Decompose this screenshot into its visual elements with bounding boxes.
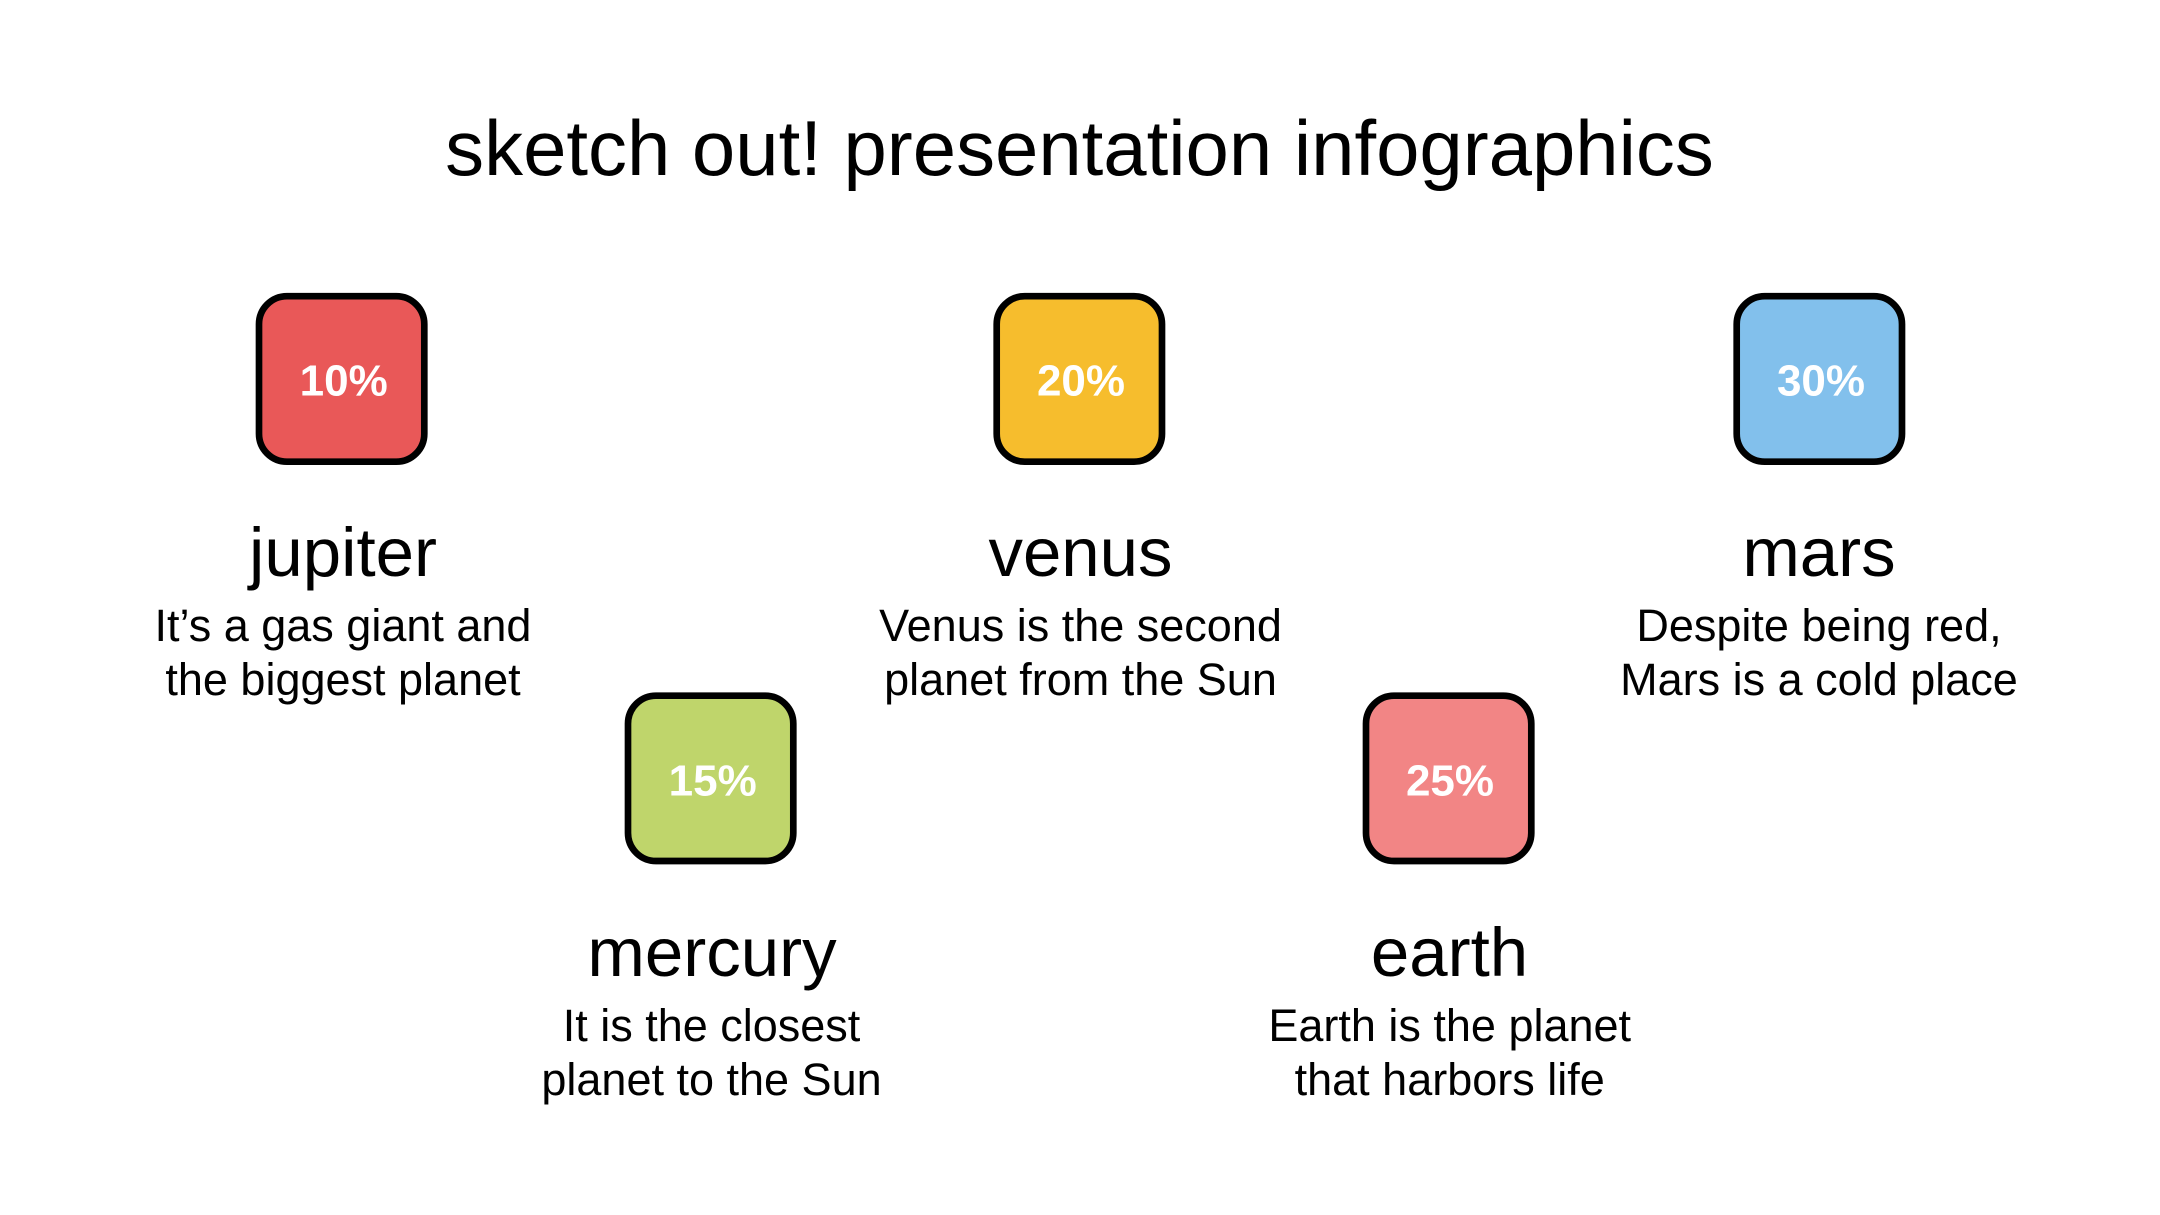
panel: jupiter (155, 296, 531, 705)
panel: venus (879, 296, 1282, 705)
panel: earth (1268, 696, 1632, 1105)
heading: mars: mars (1742, 514, 1896, 591)
heading: mercury: mercury (587, 914, 837, 991)
panel: mercury (541, 696, 882, 1105)
icon: mars 30% badge (1737, 296, 1902, 462)
text block: jupiter description: the biggest planet (165, 654, 521, 705)
text block: mercury description: planet to the Sun (541, 1054, 882, 1105)
icon: jupiter 10% badge (259, 296, 424, 462)
text block: mars description: Mars is a cold place (1620, 654, 2018, 705)
icon: mercury 15% badge: 15% (669, 756, 757, 806)
text block: earth description: that harbors life (1295, 1054, 1605, 1105)
text block: venus description: planet from the Sun (884, 654, 1277, 705)
icon: venus 20% badge (997, 296, 1162, 462)
heading: venus: venus (988, 514, 1173, 591)
text block: mercury description: It is the closest (563, 1000, 861, 1051)
icon: earth 25% badge (1366, 696, 1531, 861)
text block: mars description: Despite being red, (1636, 600, 2002, 651)
panel: mars (1620, 296, 2018, 705)
title: sketch out! presentation infographics (445, 104, 1714, 192)
icon: earth 25% badge: 25% (1406, 756, 1494, 806)
heading: earth: earth (1371, 914, 1528, 991)
icon: mercury 15% badge (628, 696, 793, 861)
icon: venus 20% badge: 20% (1037, 356, 1125, 406)
icon: jupiter 10% badge: 10% (300, 356, 388, 406)
icon: mars 30% badge: 30% (1777, 356, 1865, 406)
text block: jupiter description: It’s a gas giant and (155, 600, 531, 651)
text block: venus description: Venus is the second (879, 600, 1282, 651)
heading: jupiter: jupiter (247, 514, 437, 591)
text block: earth description: Earth is the planet (1268, 1000, 1632, 1051)
